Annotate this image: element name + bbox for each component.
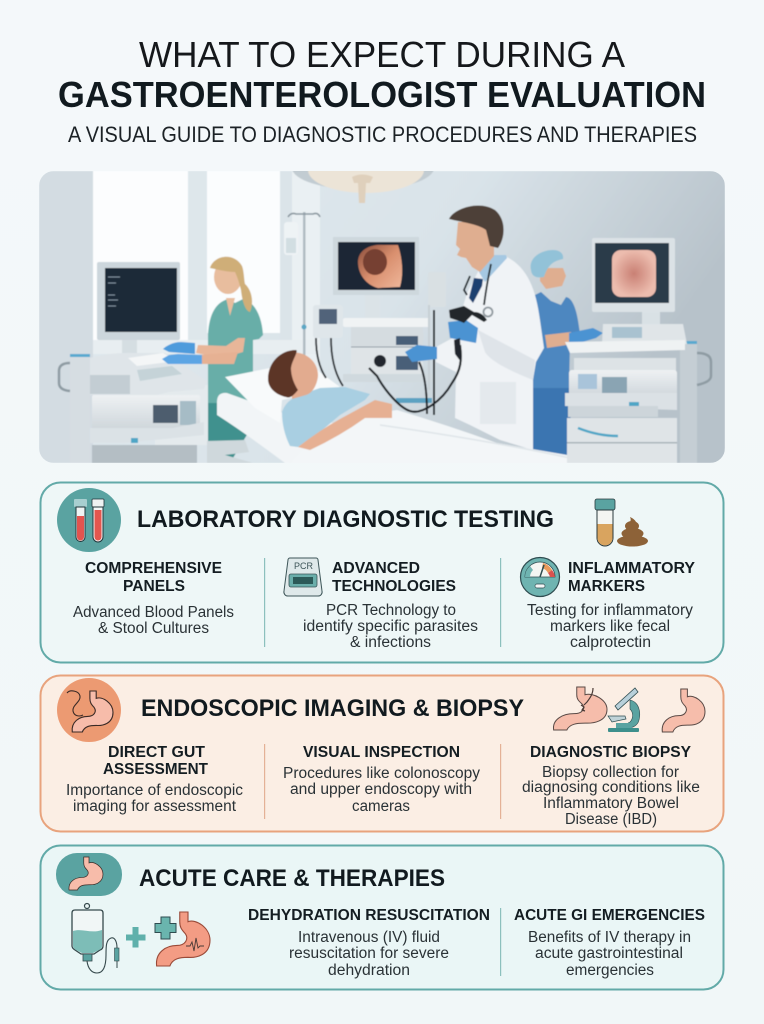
divider [264,558,265,647]
title: WHAT TO EXPECT DURING A [139,34,625,75]
panel: endoscopic imaging and biopsy [40,676,724,832]
column: comprehensive panels: COMPREHENSIVE [85,560,222,577]
patient arm [298,400,392,450]
hero illustration: endoscopy suite [39,146,725,464]
column: advanced technologies [284,558,478,651]
column: comprehensive panels: & Stool Cultures [98,620,209,637]
icon: stool sample [595,499,648,546]
icon: stomach with biopsy forceps [553,687,607,730]
column: diagnostic biopsy: DIAGNOSTIC BIOPSY [530,744,691,761]
column: diagnostic biopsy [522,744,700,828]
column: dehydration resuscitation: dehydration [328,962,410,979]
column: direct gut assessment: ASSESSMENT [103,761,208,778]
column: direct gut assessment [66,744,243,815]
column: dehydration resuscitation: resuscitation for severe [289,945,449,962]
doctor [369,205,544,450]
heading: LABORATORY DIAGNOSTIC TESTING [137,506,554,533]
divider [264,744,265,819]
column: dehydration resuscitation: DEHYDRATION RESUSCITATION [248,907,490,924]
column: comprehensive panels: Advanced Blood Panels [73,604,234,621]
column: acute gi emergencies: ACUTE GI EMERGENCIES [514,907,705,924]
pillow [224,368,340,412]
column: inflammatory markers: Testing for inflammatory [527,602,693,619]
column: acute gi emergencies [514,907,705,979]
column: advanced technologies: PCR Technology to [326,602,456,619]
icon: stomach with endoscope [57,678,121,742]
column: visual inspection: VISUAL INSPECTION [303,744,460,761]
nurse in blue [531,250,603,457]
column: inflammatory markers: markers like fecal [550,618,670,635]
heading: ENDOSCOPIC IMAGING & BIOPSY [141,695,524,722]
left monitor [97,262,180,353]
right monitor [592,238,675,325]
column: inflammatory markers: MARKERS [568,578,645,595]
column: acute gi emergencies: Benefits of IV therapy in [528,929,691,946]
iv pole [284,212,320,362]
column: direct gut assessment: DIRECT GUT [108,744,205,761]
column: acute gi emergencies: acute gastrointestinal [535,945,683,962]
center equipment tower [314,305,436,416]
column: diagnostic biopsy: diagnosing conditions like [522,779,700,796]
icon: gauge [520,558,560,596]
column: comprehensive panels: PANELS [123,578,185,595]
title [58,34,706,147]
column: comprehensive panels [73,560,234,637]
column: acute gi emergencies: emergencies [566,962,654,979]
column: advanced technologies: ADVANCED [332,560,420,577]
icon: pcr machine: PCR [294,561,313,572]
icon: plus sign [126,927,146,948]
column: inflammatory markers [520,558,695,651]
panel: laboratory diagnostic testing [40,482,724,662]
column: visual inspection: Procedures like colonoscopy [283,765,480,782]
divider [500,908,501,976]
column: diagnostic biopsy: Disease (IBD) [565,811,657,828]
icon: microscope [608,688,640,732]
ceiling lamp [292,171,434,204]
column: dehydration resuscitation [248,907,490,979]
blanket [354,410,568,458]
icon: blood test tubes [57,488,121,552]
column: direct gut assessment: imaging for assessment [73,798,237,815]
icon: pcr machine [284,558,322,596]
column: direct gut assessment: Importance of endoscopic [66,782,243,799]
left cart [59,353,207,463]
column: visual inspection: cameras [352,798,410,815]
column: advanced technologies: identify specific parasites [303,618,478,635]
nurse in teal [162,257,263,463]
column: advanced technologies: TECHNOLOGIES [332,578,456,595]
column: visual inspection [283,744,480,815]
center monitor [333,237,419,295]
title: A VISUAL GUIDE TO DIAGNOSTIC PROCEDURES AND THERAPIES [68,122,697,147]
right cart [565,324,711,463]
column: advanced technologies: & infections [350,634,431,651]
column: inflammatory markers: calprotectin [570,634,651,651]
icon: stomach with medical cross [155,912,210,966]
heading: ACUTE CARE & THERAPIES [139,865,445,892]
column: inflammatory markers: INFLAMMATORY [568,560,695,577]
panel: acute care and therapies [40,846,724,990]
icon: iv fluid bag [72,904,119,973]
column: visual inspection: and upper endoscopy with [290,781,472,798]
column: dehydration resuscitation: Intravenous (IV) fluid [298,929,440,946]
bed [208,392,332,463]
column: diagnostic biopsy: Biopsy collection for [542,764,679,781]
patient [268,350,370,447]
title: GASTROENTEROLOGIST EVALUATION [58,74,706,115]
icon: stomach badge [56,853,122,896]
column: diagnostic biopsy: Inflammatory Bowel [543,795,679,812]
icon: stomach [662,689,705,732]
